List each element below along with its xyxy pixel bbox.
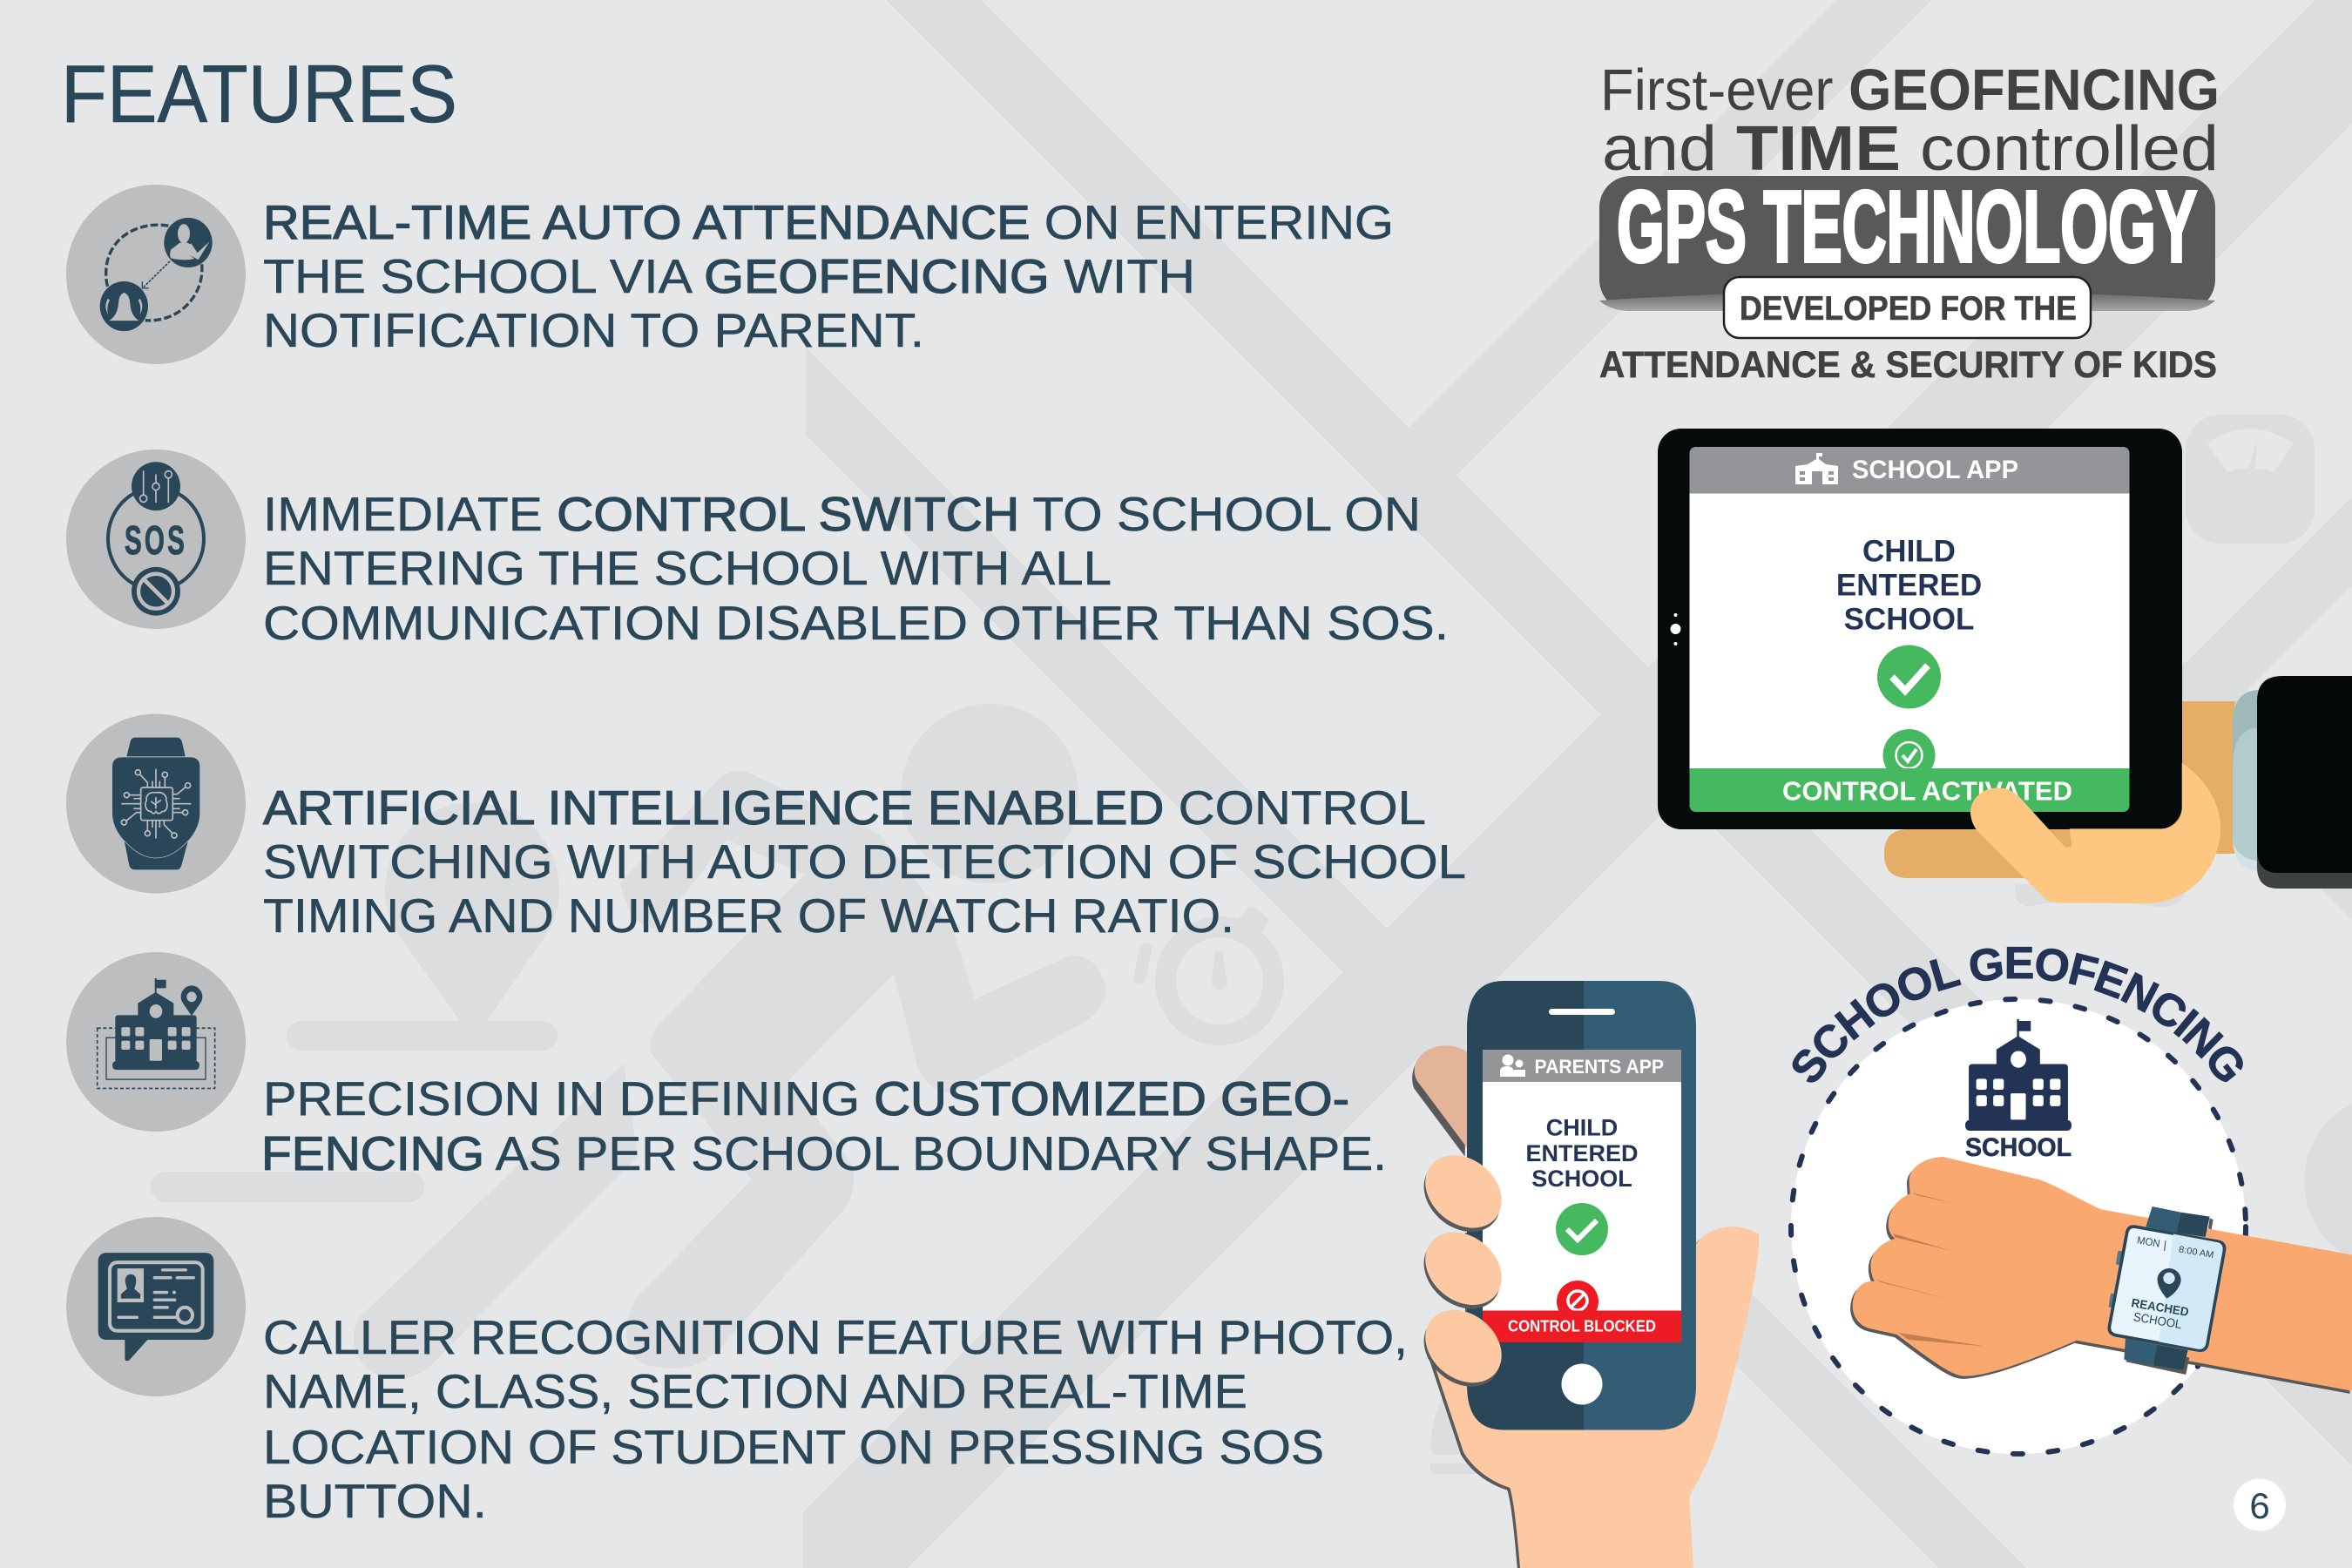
watch face text: 8:00 AM <box>2178 1244 2214 1260</box>
text block 5: BUTTON. <box>263 1474 487 1528</box>
tablet screen: CHILD <box>1862 535 1956 568</box>
pill: developed for the <box>1724 277 2091 338</box>
control blocked bar: CONTROL BLOCKED <box>1508 1318 1656 1335</box>
control activated bar <box>1690 768 2129 812</box>
control blocked bar <box>1483 1310 1681 1342</box>
illustration: school geofencing circle <box>1788 946 2352 1456</box>
hand thumb <box>1970 763 2220 903</box>
text block 3: ARTIFICIAL INTELLIGENCE ENABLED CONTROL <box>263 781 1426 835</box>
header: GPS technology headline: ATTENDANCE & SECURITY OF KIDS <box>1599 344 2217 386</box>
phone screen: PARENTS APP <box>1535 1056 1664 1078</box>
phone screen: ENTERED <box>1525 1140 1639 1166</box>
text block 1: NOTIFICATION TO PARENT. <box>263 303 924 357</box>
text block 1: THE SCHOOL VIA GEOFENCING WITH <box>263 249 1195 303</box>
text block 1: REAL-TIME AUTO ATTENDANCE ON ENTERING <box>263 195 1394 249</box>
page number <box>2234 1479 2286 1531</box>
phone screen <box>1483 1050 1681 1342</box>
illustration: tablet school app <box>1658 429 2352 903</box>
icon: attendance notification <box>66 185 246 364</box>
text block 3: TIMING AND NUMBER OF WATCH RATIO. <box>263 889 1234 943</box>
icon: green check <box>1556 1203 1608 1255</box>
illustration: phone parents app <box>1412 981 1759 1568</box>
tablet screen: SCHOOL APP <box>1852 456 2018 484</box>
watch face text: MON <box>2136 1233 2161 1250</box>
icon: small green check <box>1883 729 1936 781</box>
smartwatch <box>2108 1206 2225 1375</box>
tablet body <box>1658 429 2182 829</box>
icon: blocked <box>1557 1281 1598 1322</box>
watch face text: SCHOOL <box>2132 1309 2183 1331</box>
icon: school white <box>1795 453 1838 484</box>
phone screen: CHILD <box>1546 1115 1618 1141</box>
page number: 6 <box>2249 1485 2270 1526</box>
text block 3: SWITCHING WITH AUTO DETECTION OF SCHOOL <box>263 835 1466 889</box>
suit sleeve <box>2257 676 2352 889</box>
watch face text: REACHED <box>2130 1295 2190 1319</box>
watch face text <box>2130 1233 2214 1331</box>
control activated bar: CONTROL ACTIVATED <box>1782 775 2072 807</box>
header: GPS technology headline <box>1599 57 2220 386</box>
fingers over phone <box>1416 1143 1509 1399</box>
icon: school <box>1965 1019 2072 1131</box>
icon: AI watch <box>66 714 246 894</box>
shirt cuff <box>2233 690 2274 871</box>
panel: feature 3 <box>66 714 1466 943</box>
title: FEATURES <box>61 48 457 139</box>
icon: caller ID <box>66 1217 246 1396</box>
text block 5: CALLER RECOGNITION FEATURE WITH PHOTO, <box>263 1310 1408 1364</box>
hand and forearm <box>1850 1157 2352 1394</box>
panel: feature 2 <box>66 449 1449 650</box>
text block 5: LOCATION OF STUDENT ON PRESSING SOS <box>263 1420 1324 1474</box>
tablet screen <box>1690 447 2129 812</box>
text block 2: ENTERING THE SCHOOL WITH ALL <box>263 541 1112 595</box>
icon: SOS control <box>66 449 246 629</box>
banner: GPS technology <box>1599 170 2215 311</box>
text block 4 <box>261 1071 1387 1180</box>
SOS label: SOS <box>125 517 187 563</box>
panel: feature 4 <box>66 952 1387 1180</box>
tablet screen: SCHOOL <box>1844 603 1974 636</box>
phone body <box>1467 981 1696 1430</box>
panel: feature 1 <box>66 185 1394 364</box>
text block 5: NAME, CLASS, SECTION AND REAL-TIME <box>263 1364 1247 1418</box>
phone screen: SCHOOL <box>1531 1166 1632 1192</box>
geofence circle <box>1791 999 2246 1454</box>
text block 4: FENCING AS PER SCHOOL BOUNDARY SHAPE. <box>261 1126 1387 1180</box>
icon: green check <box>1877 645 1941 709</box>
pill: developed for the: DEVELOPED FOR THE <box>1740 290 2077 328</box>
header: GPS technology headline: and TIME controlled <box>1602 114 2219 184</box>
panel: feature 5 <box>66 1217 1408 1528</box>
icon: parents <box>1500 1054 1525 1077</box>
arc title: SCHOOL GEOFENCING <box>1793 946 2243 1083</box>
header: GPS technology headline: First-ever GEOFENCING <box>1600 57 2220 123</box>
text block 3 <box>263 781 1466 943</box>
hand behind tablet <box>1884 701 2247 878</box>
text block 2 <box>263 487 1449 650</box>
hand holding phone <box>1412 1045 1759 1568</box>
text block 2: IMMEDIATE CONTROL SWITCH TO SCHOOL ON <box>263 487 1421 541</box>
text block 1 <box>263 195 1394 357</box>
text block 4: PRECISION IN DEFINING CUSTOMIZED GEO- <box>263 1071 1349 1125</box>
illustration: school geofencing circle: SCHOOL <box>1965 1133 2072 1162</box>
icon: school geofence <box>66 952 246 1132</box>
text block 5 <box>263 1310 1408 1528</box>
tablet screen: ENTERED <box>1836 568 1982 603</box>
text block 2: COMMUNICATION DISABLED OTHER THAN SOS. <box>263 596 1449 650</box>
